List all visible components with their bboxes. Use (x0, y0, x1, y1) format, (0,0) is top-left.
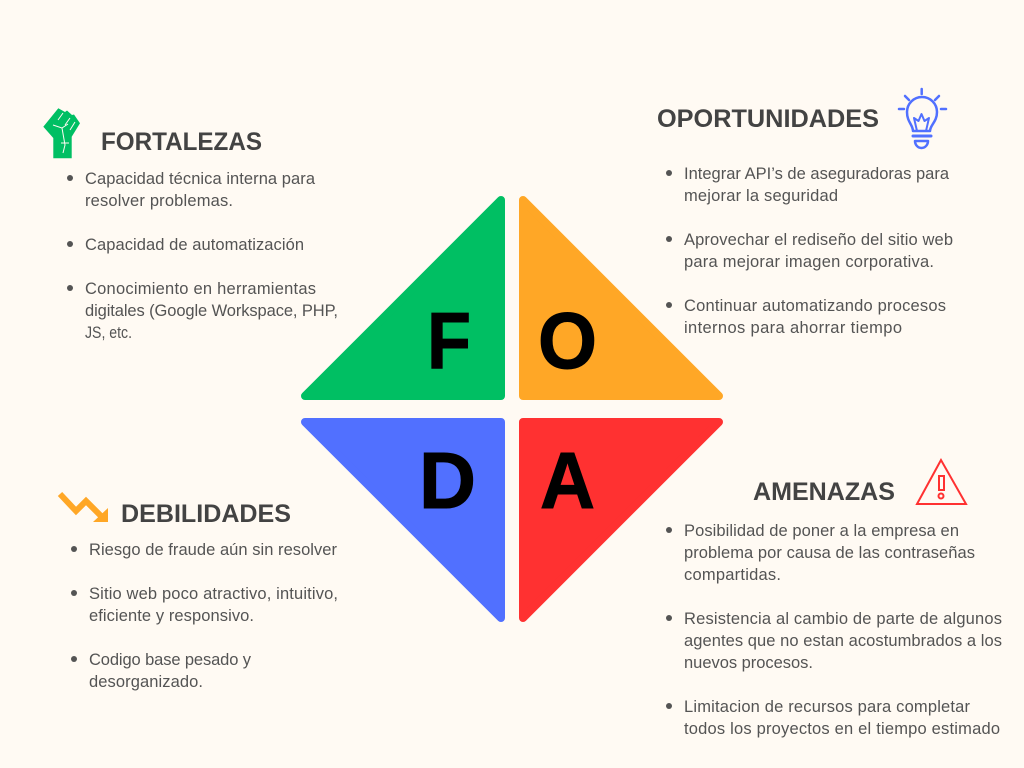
panel: debilidades (60, 494, 338, 691)
list: oportunidades: Integrar API’s de aseguradoras para (684, 165, 950, 183)
icon: light bulb (899, 89, 946, 148)
list: oportunidades: internos para ahorrar tiempo (684, 319, 902, 337)
panel: oportunidades (657, 89, 953, 337)
list: debilidades: Riesgo de fraude aún sin resolver (89, 541, 338, 559)
list: amenazas: todos los proyectos en el tiempo estimado (684, 720, 1000, 738)
list: debilidades (71, 541, 338, 691)
heading: debilidades: DEBILIDADES (121, 500, 291, 528)
list: debilidades: Sitio web poco atractivo, intuitivo, (89, 585, 338, 603)
heading: fortalezas: FORTALEZAS (101, 128, 262, 156)
panel: amenazas (666, 460, 1002, 738)
list: amenazas: Limitacion de recursos para completar (684, 698, 970, 716)
list: amenazas: Posibilidad de poner a la empresa en (684, 522, 959, 540)
heading: amenazas: AMENAZAS (753, 478, 895, 506)
list: debilidades: desorganizado. (89, 673, 203, 691)
quadrant F: green triangle (305, 200, 501, 396)
central FODA diamond (305, 200, 719, 618)
quadrant D: blue triangle: D (419, 436, 476, 525)
list: amenazas (666, 522, 1002, 738)
list: fortalezas: Conocimiento en herramientas (85, 280, 316, 298)
list: fortalezas (67, 170, 338, 342)
quadrant A: red triangle: A (540, 436, 595, 525)
list: debilidades: Codigo base pesado y (89, 651, 252, 669)
list: fortalezas: Capacidad de automatización (85, 236, 304, 254)
quadrant O: orange triangle (523, 200, 719, 396)
list: fortalezas: JS, etc. (85, 324, 132, 342)
list: amenazas: problema por causa de las contraseñas (684, 544, 975, 562)
list: oportunidades (666, 165, 953, 337)
list: amenazas: Resistencia al cambio de parte de algunos (684, 610, 1002, 628)
icon: warning triangle (917, 460, 966, 504)
list: fortalezas: Capacidad técnica interna para (85, 170, 316, 188)
list: amenazas: nuevos procesos. (684, 654, 813, 672)
list: amenazas: agentes que no estan acostumbrados a los (684, 632, 1002, 650)
icon: downward arrow (60, 494, 108, 522)
quadrant O: orange triangle: O (538, 296, 597, 385)
list: oportunidades: para mejorar imagen corporativa. (684, 253, 934, 271)
list: oportunidades: mejorar la seguridad (684, 187, 838, 205)
heading: oportunidades: OPORTUNIDADES (657, 105, 879, 133)
quadrant F: green triangle: F (427, 296, 471, 385)
list: oportunidades: Continuar automatizando procesos (684, 297, 946, 315)
list: amenazas: compartidas. (684, 566, 781, 584)
quadrant A: red triangle (523, 422, 719, 618)
list: oportunidades: Aprovechar el rediseño del sitio web (684, 231, 953, 249)
list: fortalezas: digitales (Google Workspace, PHP, (85, 302, 338, 320)
icon: raised fist (43, 108, 80, 158)
list: debilidades: eficiente y responsivo. (89, 607, 254, 625)
panel: fortalezas (43, 108, 338, 342)
quadrant D: blue triangle (305, 422, 501, 618)
list: fortalezas: resolver problemas. (85, 192, 233, 210)
